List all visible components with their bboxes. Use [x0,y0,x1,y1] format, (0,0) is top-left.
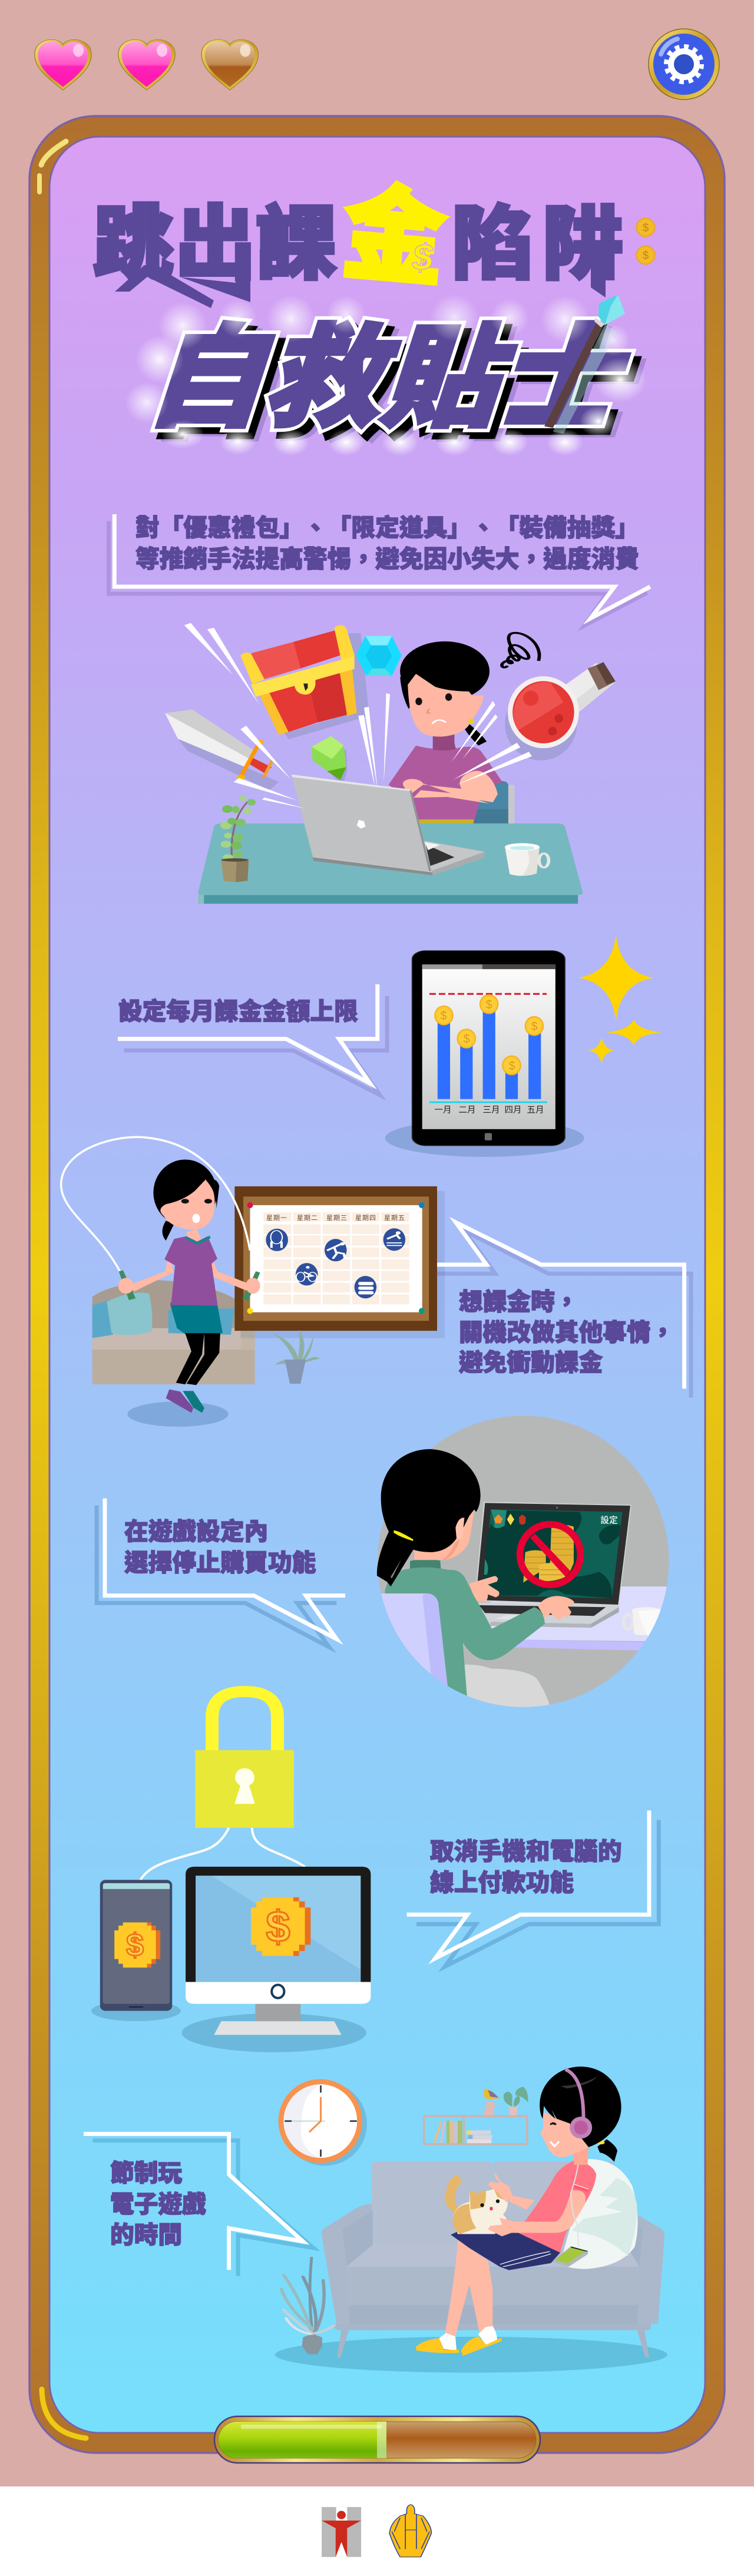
motion rays [184,623,532,809]
earphone cable [571,2137,581,2247]
coin stacks with prohibition sign [520,1525,580,1585]
title: 跳出課金陷阱: $ [412,237,434,278]
hair and head [153,1159,219,1241]
mug [505,843,548,876]
icon: blue gem [356,636,402,676]
callout: avoid promotions [108,514,650,626]
phone [552,2246,588,2267]
title: 跳出課金陷阱: 阱 [542,199,623,290]
callout bubble outline [118,984,387,1095]
logo: Health department emblem [322,2507,361,2557]
title black layer: 救 [260,323,418,448]
title purple fill: 貼 [371,316,529,441]
callout: cancel online payment: 線上付款功能 [430,1869,574,1896]
chair [471,781,514,824]
illustration: girl jumping rope [61,1137,260,1413]
callout: do something else [437,1222,691,1398]
title black layer: 士 [494,323,652,448]
logo: yellow hands emblem [389,2505,431,2557]
illustration: sofa [275,2162,667,2373]
callout text: 關機改做其他事情， [459,1319,674,1346]
pillow [560,2159,638,2269]
icon: gold coins colon: $ [643,222,649,234]
schedule day labels: 星期二 [297,1214,318,1222]
footer white band [0,2486,754,2576]
plant [220,796,256,882]
illustration: girl with headphones and cat on sofa [416,2066,638,2356]
monitor coin dollar sign: $ [266,1902,290,1951]
title white outline: 士 [488,316,646,441]
chart coin symbols and month labels: 五月 [527,1106,544,1115]
laptop base [477,1602,619,1628]
padlock shackle [212,1691,277,1751]
title shadow layer: 貼 [382,326,540,451]
chart coin symbols and month labels: 四月 [504,1106,522,1115]
title purple fill [137,316,646,441]
callout bubble outline [97,1499,345,1647]
callout bubble outline [437,1222,691,1398]
body and clothes [131,1229,250,1413]
schedule day labels: 星期三 [326,1214,348,1222]
chart coin symbols and month labels: 三月 [483,1106,500,1115]
icon: pink heart 2 [118,39,175,90]
schedule day labels [266,1214,405,1222]
illustration: floor plant [282,2258,334,2354]
settings label: 設定 [600,1515,618,1526]
icon: yellow sparkle stars [578,935,662,1064]
callout text: 在遊戲設定內 [124,1518,268,1545]
chart coin symbols and month labels: $ [463,1033,470,1046]
title purple fill: 自 [137,316,295,441]
icon: desktop monitor with coin [182,1867,371,2052]
pins [247,1202,425,1314]
icon: hearts lives [35,39,258,90]
callout text [459,1288,674,1376]
illustration: exercise schedule board [234,1186,445,1338]
keyhole [234,1768,255,1804]
icon: smartphone with coin [91,1880,181,2021]
back cushion chair [381,1593,448,1686]
title black layer: 自 [143,323,300,448]
title: 跳出課金陷阱: 跳 [92,199,174,290]
headphones [566,2069,592,2138]
icon: sword and crystal [544,295,625,434]
title: 跳出課金陷阱: 出 [175,199,256,290]
icon: settings gear button [649,29,719,100]
neck [573,2144,588,2165]
padlock body [195,1750,294,1828]
callout text: 電子遊戲 [110,2191,206,2218]
table [198,824,583,904]
chart coin symbols and month labels: 一月 [435,1106,451,1115]
callout text: 想課金時， [459,1288,578,1315]
callout bubble outline [108,514,650,626]
icon: pink heart 1 [35,39,91,90]
schedule day labels: 星期一 [266,1214,287,1222]
activity icons [266,1228,405,1298]
chart coin symbols and month labels [435,998,544,1115]
callout bubble outline [407,1810,659,1967]
cables [140,1828,305,1880]
title shadow layer [147,326,657,451]
callout: monthly spending limit [118,984,387,1095]
title shadow layer: 自 [147,326,305,451]
callout text: 設定每月課金金額上限 [118,998,358,1025]
callout text: 的時間 [110,2221,182,2248]
chart coin symbols and month labels: $ [531,1020,538,1033]
skipping rope [61,1137,250,1272]
legs [416,2240,501,2356]
callout: limit gaming time [84,2134,313,2276]
title: 跳出課金陷阱: 陷 [452,199,533,290]
callout: stop purchase setting: 選擇停止購買功能 [124,1549,316,1576]
illustration: shelf with books, bird and plant [424,2086,528,2144]
progress bar [214,2416,540,2463]
title: 跳出課金陷阱: 金 [338,175,451,299]
grey circle background with contents [375,1414,673,1710]
callout: stop purchase setting [97,1499,345,1647]
callout text: 節制玩 [110,2160,182,2187]
callout: cancel online payment [407,1810,659,1967]
title: 跳出課金陷阱 [92,175,623,308]
illustration: tablet with spending chart [385,951,584,1157]
hands [469,1576,574,1620]
head and hair [540,2066,621,2157]
title white outline: 貼 [371,316,529,441]
tablet body [385,951,584,1157]
laptop screen [475,1502,631,1606]
head, ear and hair [377,1449,481,1586]
mug [624,1607,661,1636]
bar chart [429,994,547,1103]
title shadow layer: 救 [264,326,422,451]
desk [491,1586,672,1651]
title shadow layer: 士 [499,326,657,451]
title white outline [137,316,646,441]
title black layer [143,323,652,448]
icon: gold coins colon [636,218,655,264]
title: 自救貼士 [137,316,657,451]
title white outline: 救 [254,316,412,441]
girl sweater [385,1559,545,1701]
arms [488,2172,589,2236]
icon: red potion [505,662,616,760]
schedule day labels: 星期五 [384,1214,405,1222]
game gems [494,1513,526,1525]
icon: empty brown heart [201,39,258,90]
title black layer: 貼 [377,323,535,448]
icon: padlock with cables [140,1691,305,1880]
illustration: girl tempted by game items at laptop [165,623,616,904]
title purple fill: 士 [488,316,646,441]
icon: treasure chest [240,625,369,739]
girl [389,641,502,824]
callout text: 取消手機和電腦的 [430,1838,622,1865]
shorts [451,2231,560,2270]
title white outline: 自 [137,316,295,441]
illustration: sofa behind jumping girl [92,1280,255,1427]
ponytail [597,2139,617,2162]
callout bubble outline [84,2134,313,2276]
schedule day labels: 星期四 [355,1214,376,1222]
phone coin dollar sign: $ [126,1927,144,1963]
illustration: wall clock [279,2079,367,2166]
title purple fill: 救 [254,316,412,441]
icon: sword [165,710,279,790]
callout: avoid promotions: 等推銷手法提高警惕，避免因小失大，過度消費 [135,545,639,573]
chart coin symbols and month labels: $ [508,1060,515,1073]
icon: gold coins colon: $ [643,250,649,262]
cat [445,2175,508,2234]
legs seat [464,1665,550,1710]
icon: dizzy spiral [502,633,540,667]
callout text [110,2160,206,2248]
sparkles [125,294,647,456]
laptop [292,775,485,875]
illustration: potted plant [273,1330,320,1384]
callout text: 對「優惠禮包」、「限定道具」、「裝備抽獎」 [135,514,639,541]
title: 跳出課金陷阱: 課 [256,199,337,290]
icon: green gem [312,736,347,786]
callout text: 避免衝動課金 [459,1349,603,1376]
schedule grid [263,1212,409,1304]
chart coin symbols and month labels: $ [440,1010,447,1023]
illustration: girl disabling purchases on laptop [375,1414,673,1710]
hands and rope handles [118,1270,260,1301]
chart coin symbols and month labels: $ [485,998,492,1011]
chart coin symbols and month labels: 二月 [458,1106,476,1115]
shirt [516,2161,596,2253]
